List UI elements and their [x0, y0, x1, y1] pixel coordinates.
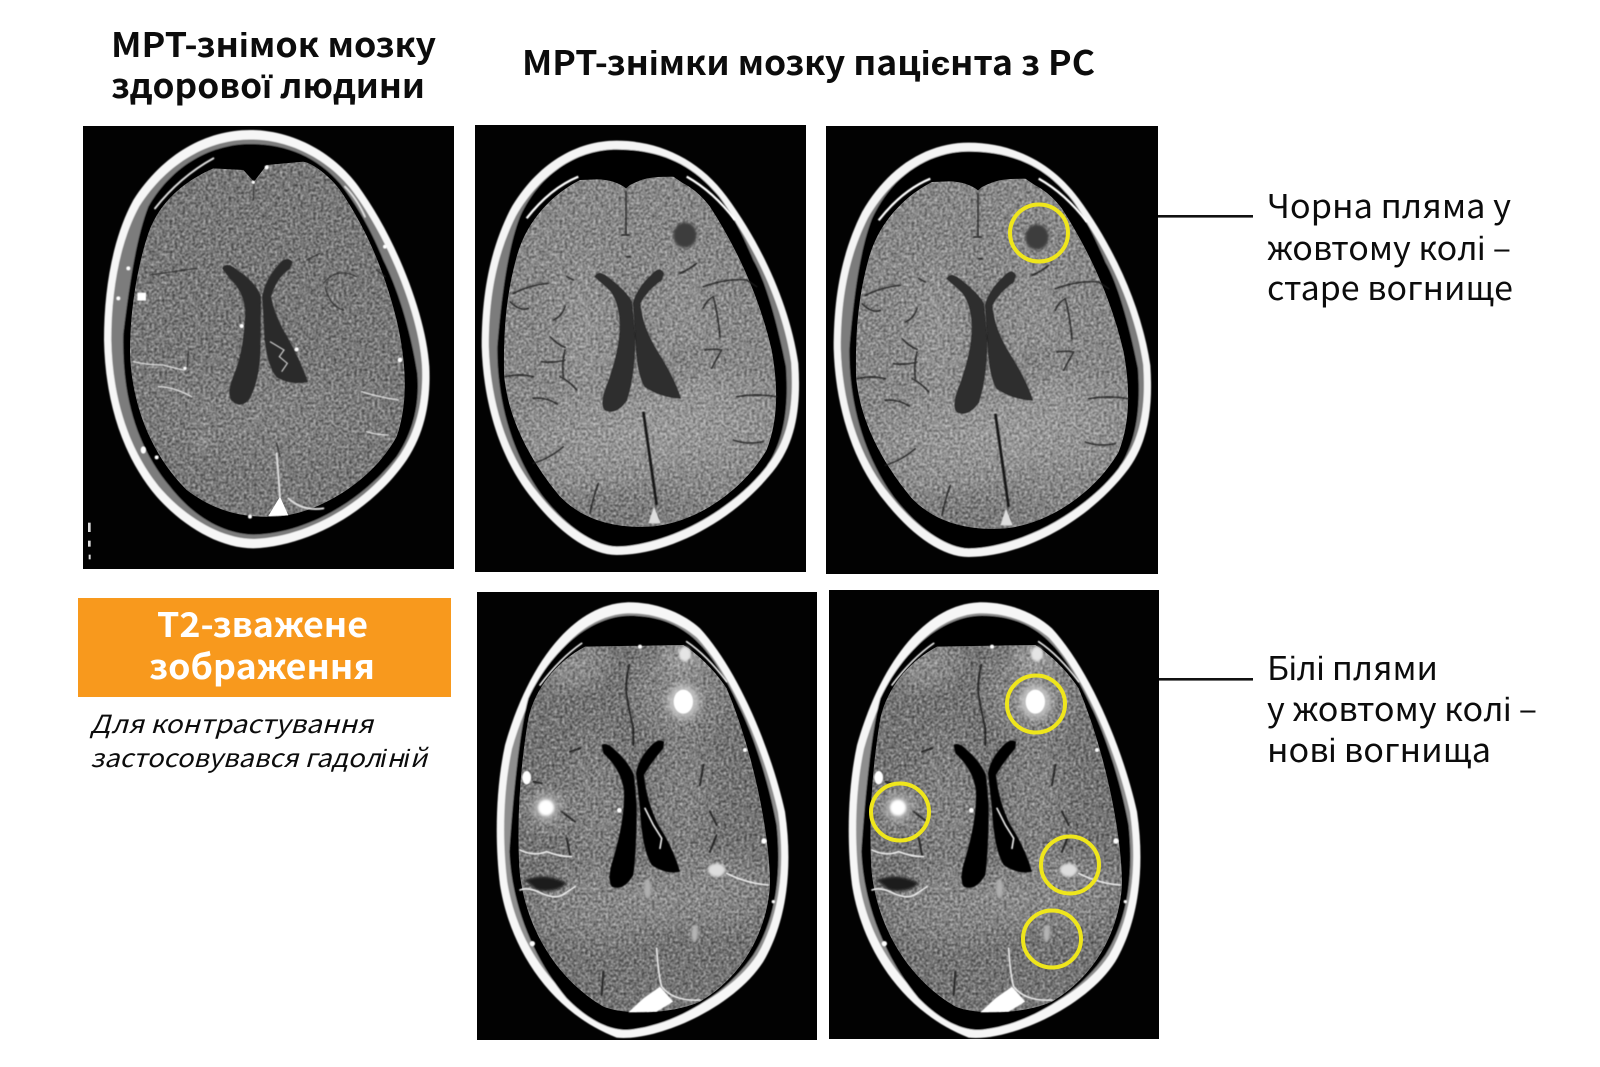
note: gadolinium contrast: застосовувався гадоліній	[90, 739, 429, 775]
orange label: T2-weighted image: зображення	[149, 640, 375, 689]
label: old lesion: Чорна пляма у	[1267, 180, 1511, 228]
label: new lesions: Білі плями	[1267, 642, 1438, 690]
label: new lesions	[1267, 642, 1537, 772]
yellow circles: new lesions	[871, 676, 1099, 968]
brain scan: bright lesions	[497, 602, 797, 1038]
brain scan: bright lesions copy	[849, 602, 1149, 1038]
leader line: new lesions	[1159, 678, 1253, 681]
label: new lesions: нові вогнища	[1267, 724, 1491, 772]
orange label: T2-weighted image: Т2-зважене	[157, 598, 368, 647]
panel: healthy brain scan	[83, 126, 454, 569]
note: gadolinium contrast: Для контрастування	[89, 705, 375, 741]
heading: healthy brain MRI: МРТ-знімок мозку	[111, 18, 436, 67]
label: old lesion	[1267, 180, 1513, 310]
panel: MS patient scan, T2 with marked lesions	[829, 590, 1159, 1039]
orange label: T2-weighted image	[78, 598, 451, 697]
brain scan: dark lesion copy	[834, 143, 1152, 557]
panel: MS patient scan, T2	[477, 592, 817, 1040]
note: gadolinium contrast	[89, 705, 429, 775]
label: old lesion: жовтому колі –	[1267, 222, 1511, 270]
leader line: old lesion	[1158, 215, 1253, 218]
heading: MS patient MRI: МРТ-знімки мозку пацієнта з РС	[522, 36, 1095, 85]
label: new lesions: у жовтому колі –	[1267, 683, 1537, 731]
brain scan: healthy	[88, 130, 430, 559]
brain scan: dark lesion	[482, 141, 800, 555]
yellow circle: old lesion	[1010, 204, 1068, 262]
heading: healthy brain MRI	[111, 18, 436, 108]
panel: MS patient scan, T1 with marked lesion	[826, 126, 1158, 574]
panel: MS patient scan, T1	[475, 125, 806, 572]
heading: healthy brain MRI: здорової людини	[111, 59, 425, 108]
label: old lesion: старе вогнище	[1267, 262, 1513, 310]
